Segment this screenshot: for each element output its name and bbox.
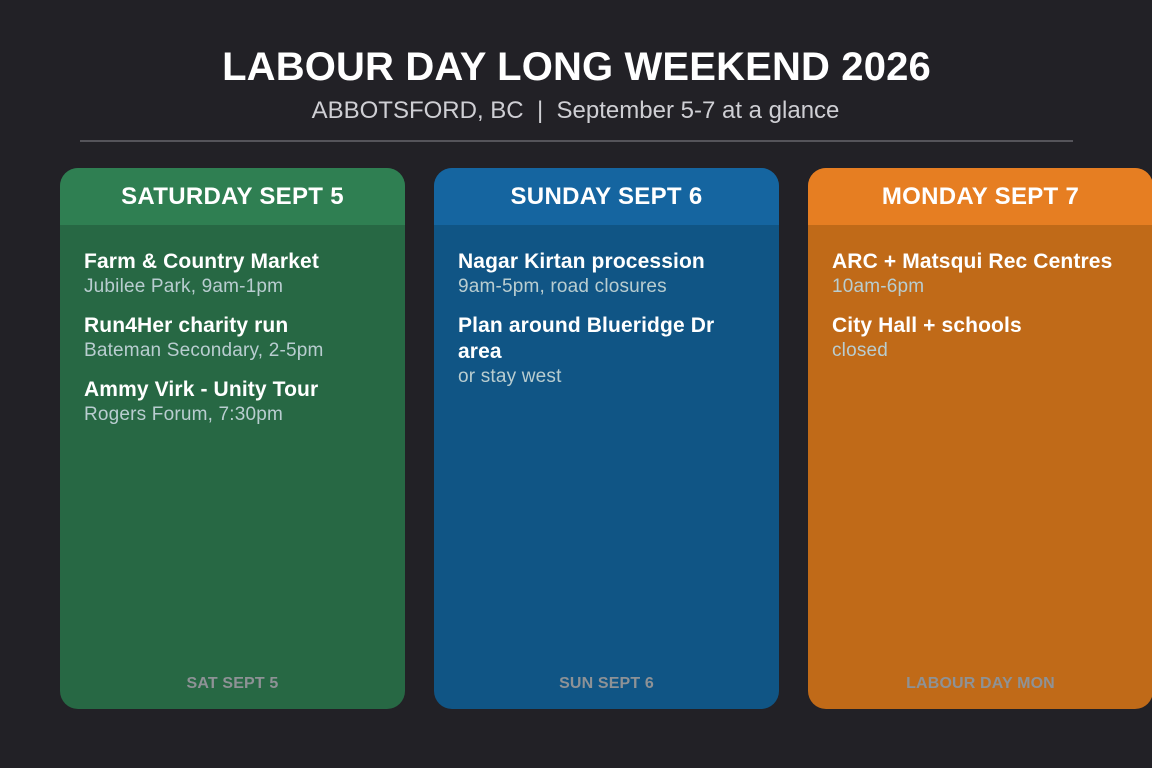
event detail: or stay west: or stay west bbox=[458, 366, 562, 387]
event: Plan around Blueridge Dr area: Plan around Blueridge Dr area bbox=[458, 314, 714, 363]
event detail: Jubilee Park: Jubilee Park, 9am-1pm bbox=[84, 276, 283, 297]
event: ARC + Matsqui Rec Centres: ARC + Matsqui Rec Centres bbox=[832, 250, 1112, 273]
event detail: closed: closed bbox=[832, 340, 888, 361]
event detail: Rogers Forum: Rogers Forum, 7:30pm bbox=[84, 404, 283, 425]
footer label: SUN SEPT 6 bbox=[559, 675, 654, 692]
event: Ammy Virk: Ammy Virk - Unity Tour bbox=[84, 378, 318, 401]
panel: Saturday bbox=[60, 168, 405, 709]
subtitle: ABBOTSFORD, BC | September 5-7 at a glance bbox=[312, 97, 839, 124]
heading: Sunday Sept 6 bbox=[434, 168, 779, 225]
event: Nagar Kirtan procession: Nagar Kirtan procession bbox=[458, 250, 705, 273]
event detail: road closures: 9am-5pm, road closures bbox=[458, 276, 667, 297]
footer label: LABOUR DAY MON bbox=[906, 675, 1055, 692]
heading: Monday Sept 7 bbox=[808, 168, 1152, 225]
heading: Saturday Sept 5: SATURDAY SEPT 5 bbox=[121, 183, 344, 210]
panel: Sunday bbox=[434, 168, 779, 709]
event: Run4Her charity run: Run4Her charity run bbox=[84, 314, 288, 337]
event: City Hall + schools: City Hall + schools bbox=[832, 314, 1022, 337]
event: Farm & Country Market: Farm & Country Market bbox=[84, 250, 319, 273]
title: LABOUR DAY LONG WEEKEND 2026 bbox=[222, 45, 931, 89]
heading: Monday Sept 7: MONDAY SEPT 7 bbox=[882, 183, 1079, 210]
event detail: Bateman Secondary: Bateman Secondary, 2-5pm bbox=[84, 340, 323, 361]
heading: Saturday Sept 5 bbox=[60, 168, 405, 225]
event detail: hours: 10am-6pm bbox=[832, 276, 924, 297]
panel: Monday bbox=[808, 168, 1152, 709]
heading: Sunday Sept 6: SUNDAY SEPT 6 bbox=[510, 183, 702, 210]
footer label: SAT SEPT 5 bbox=[187, 675, 278, 692]
